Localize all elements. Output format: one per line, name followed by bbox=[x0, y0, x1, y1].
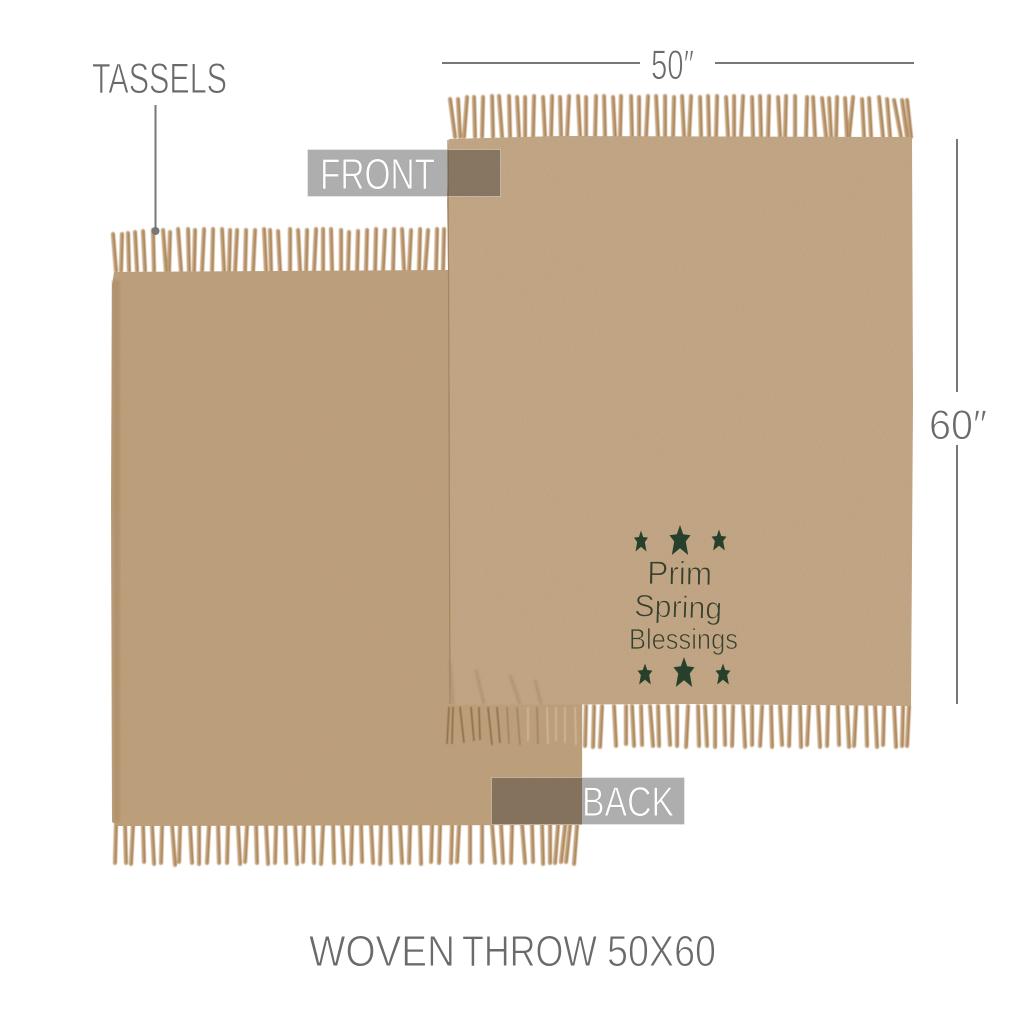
front label text: FRONT bbox=[320, 150, 435, 199]
front throw fabric bbox=[447, 136, 913, 706]
back throw fabric bbox=[111, 270, 583, 826]
back throw bottom tassels bbox=[115, 825, 578, 865]
title: THROW bbox=[462, 927, 597, 976]
front throw panel bbox=[447, 96, 913, 747]
title: 50X60 bbox=[607, 927, 716, 976]
width line left bbox=[442, 62, 640, 64]
back throw panel bbox=[111, 229, 583, 865]
back label box bbox=[492, 778, 684, 824]
front throw lower fold shadows bbox=[450, 662, 541, 704]
embroidered design bbox=[629, 525, 738, 687]
embroidered text: Blessings: Blessings bbox=[629, 624, 738, 656]
tassels leader dot bbox=[152, 227, 160, 235]
width line right bbox=[715, 62, 914, 64]
width value: 50″ bbox=[651, 41, 694, 88]
back throw side hem bbox=[112, 280, 120, 822]
callout: TASSELS bbox=[92, 55, 227, 235]
back label text: BACK bbox=[582, 778, 674, 825]
tassels label: TASSELS bbox=[92, 55, 227, 103]
tassels leader line bbox=[154, 105, 156, 231]
ghost tassels seen through back throw bbox=[447, 707, 576, 745]
icon: top stars bbox=[634, 525, 726, 555]
front throw left hem bbox=[448, 140, 450, 704]
front throw bottom tassels bbox=[585, 706, 910, 747]
title bbox=[309, 927, 716, 976]
back throw top tassels bbox=[113, 229, 445, 271]
height line top bbox=[956, 139, 958, 392]
front label box bbox=[308, 150, 500, 196]
height line bottom bbox=[956, 445, 958, 704]
title: WOVEN bbox=[309, 927, 455, 976]
icon: bottom stars bbox=[638, 657, 730, 687]
label: BACK bbox=[492, 778, 684, 825]
front throw top tassels bbox=[450, 96, 912, 137]
embroidered text: Prim: Prim bbox=[647, 554, 713, 592]
height value: 60″ bbox=[929, 401, 987, 448]
embroidered text: Spring: Spring bbox=[634, 588, 723, 626]
label: FRONT bbox=[308, 150, 500, 199]
